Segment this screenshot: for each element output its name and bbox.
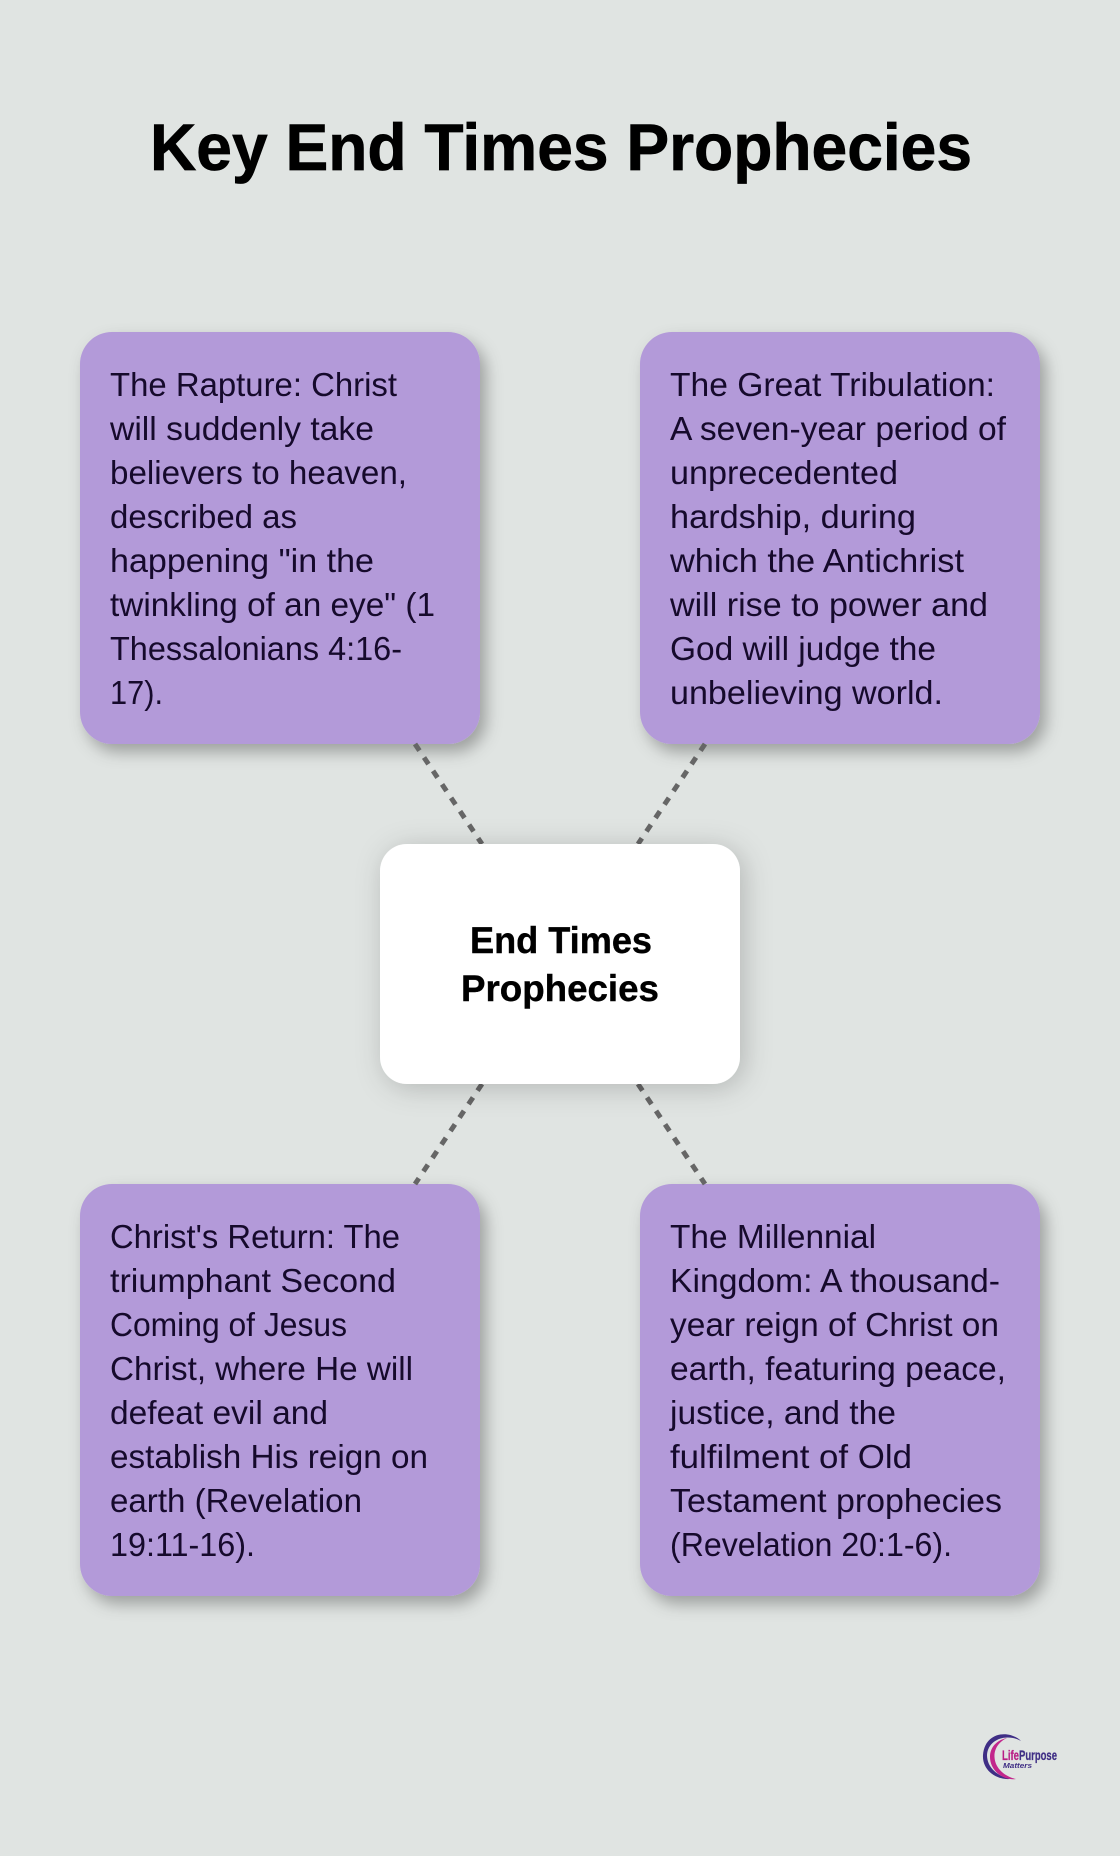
- card text: hardship, during: [670, 498, 916, 535]
- logo arcs: [983, 1734, 1021, 1779]
- card text: year reign of Christ on: [670, 1306, 999, 1343]
- center label: Prophecies: [461, 968, 659, 1009]
- card text: Christ, where He will: [110, 1350, 413, 1387]
- title: Key End Times Prophecies: [150, 110, 972, 184]
- logo text: Life: [1002, 1747, 1019, 1763]
- card text: [110, 1218, 428, 1563]
- card text: Testament prophecies: [670, 1482, 1002, 1519]
- card text: will rise to power and: [669, 586, 988, 623]
- card text: A seven-year period of: [670, 410, 1007, 447]
- card text: Kingdom: A thousand-: [670, 1262, 1000, 1299]
- logo text: Purpose: [1019, 1747, 1057, 1763]
- panel: The Great Tribulation: [640, 332, 1040, 744]
- card text: Coming of Jesus: [110, 1306, 347, 1343]
- dashed connectors: [415, 744, 705, 1184]
- card text: earth (Revelation: [110, 1482, 362, 1519]
- center label: End Times: [470, 920, 652, 961]
- card text: which the Antichrist: [669, 542, 964, 579]
- card text: [669, 366, 1007, 711]
- card text: unbelieving world.: [670, 674, 943, 711]
- center box: [380, 844, 740, 1084]
- panel: The Rapture: [80, 332, 480, 744]
- card text: justice, and the: [669, 1394, 896, 1431]
- panel: Christ's Return: [80, 1184, 480, 1596]
- logo text: Matters: [1003, 1761, 1032, 1770]
- center label: [461, 920, 659, 1009]
- card text: described as: [110, 498, 297, 535]
- card text: twinkling of an eye" (1: [110, 586, 435, 623]
- card text: earth, featuring peace,: [670, 1350, 1006, 1387]
- card text: establish His reign on: [110, 1438, 428, 1475]
- card text: [669, 1218, 1006, 1563]
- card text: (Revelation 20:1-6).: [670, 1526, 952, 1563]
- card text: The Great Tribulation:: [670, 366, 995, 403]
- card background: [640, 1184, 1040, 1596]
- logo: Life Purpose Matters: [983, 1734, 1057, 1779]
- card background: [640, 332, 1040, 744]
- card text: 17).: [110, 674, 163, 711]
- panel: center node: [380, 844, 740, 1084]
- card text: believers to heaven,: [110, 454, 407, 491]
- card background: [80, 1184, 480, 1596]
- card text: unprecedented: [670, 454, 898, 491]
- card text: fulfilment of Old: [670, 1438, 912, 1475]
- card text: triumphant Second: [110, 1262, 396, 1299]
- card text: The Rapture: Christ: [110, 366, 397, 403]
- panel: The Millennial Kingdom: [640, 1184, 1040, 1596]
- card text: defeat evil and: [110, 1394, 328, 1431]
- card text: 19:11-16).: [110, 1526, 255, 1563]
- card text: The Millennial: [670, 1218, 876, 1255]
- card text: happening "in the: [110, 542, 374, 579]
- card text: Christ's Return: The: [110, 1218, 400, 1255]
- card text: [109, 366, 435, 711]
- card text: Thessalonians 4:16-: [110, 630, 402, 667]
- logo text: [1002, 1747, 1057, 1770]
- card background: [80, 332, 480, 744]
- card text: will suddenly take: [109, 410, 374, 447]
- card text: God will judge the: [670, 630, 936, 667]
